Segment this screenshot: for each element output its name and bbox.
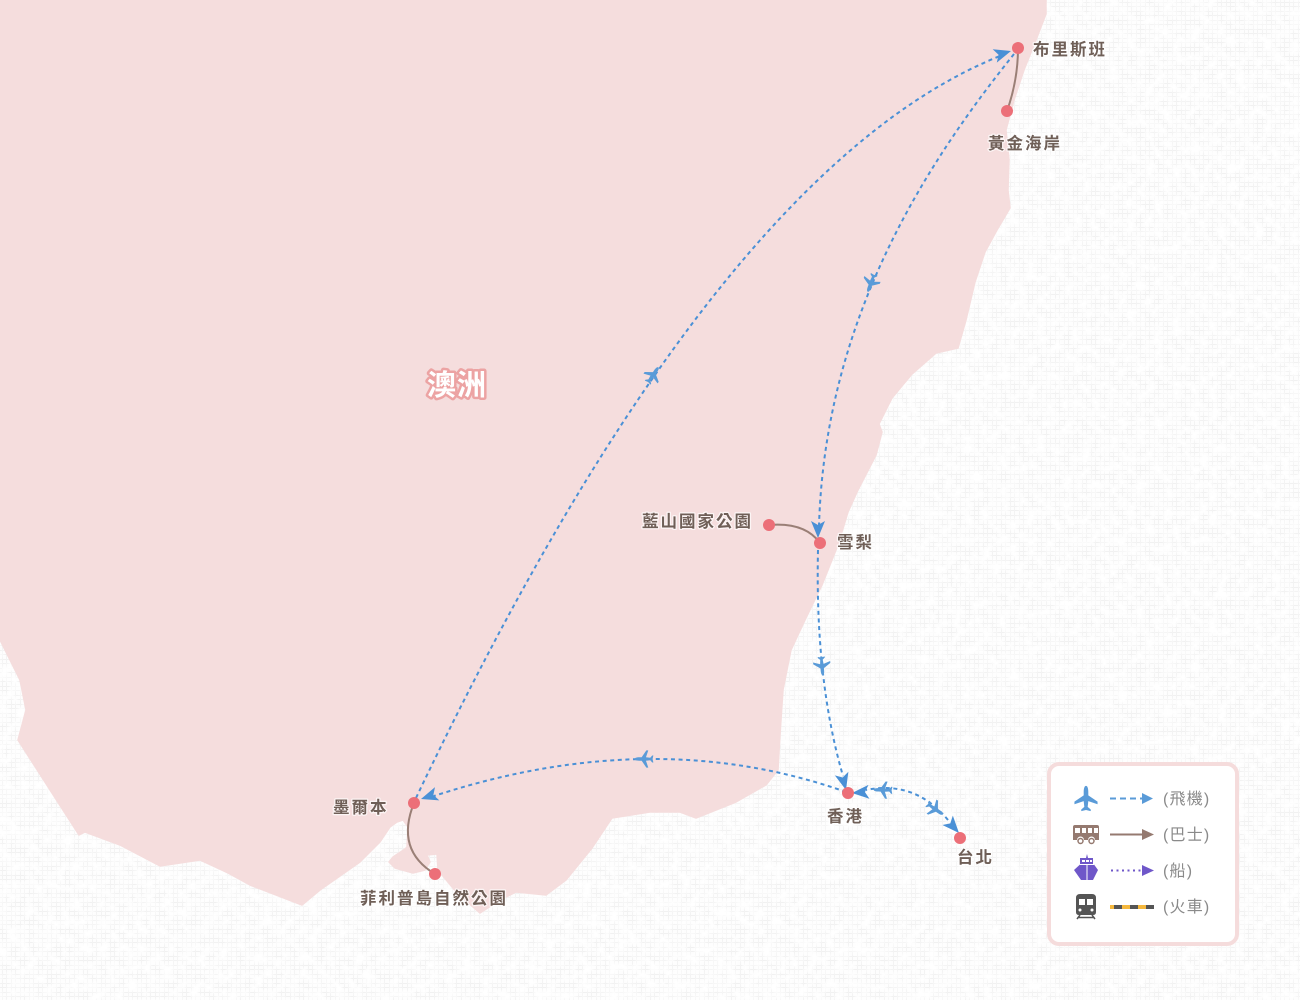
legend [1049, 764, 1237, 944]
route: Taipei to Hong Kong by plane [852, 781, 964, 838]
city: Melbourne: 墨爾本 [333, 798, 388, 817]
route: Sydney to Hong Kong by plane [813, 550, 853, 792]
city: Hong Kong [827, 787, 864, 826]
legend row: plane: (飛機) [1163, 790, 1210, 808]
city: Taipei: 台北 [957, 847, 994, 867]
city: Taipei [954, 832, 994, 867]
city: Blue Mountains National Park: 藍山國家公園 [642, 511, 753, 531]
city: Phillip Island Nature Park: 菲利普島自然公園 [360, 888, 508, 908]
legend row: bus: (巴士) [1163, 826, 1210, 844]
city: Hong Kong: 香港 [827, 807, 864, 826]
legend row: train [1076, 894, 1210, 919]
route: Brisbane to Gold Coast by bus [1007, 48, 1018, 111]
legend row: train: (火車) [1163, 898, 1210, 916]
route: Melbourne to Phillip Island by bus [408, 803, 435, 874]
city: Sydney [814, 533, 874, 552]
route: Hong Kong to Melbourne by plane [419, 750, 846, 806]
legend row: ship: (船) [1163, 862, 1193, 880]
city: Sydney: 雪梨 [837, 533, 874, 552]
city: Phillip Island Nature Park [360, 868, 508, 908]
legend panel [1049, 764, 1237, 944]
route: Brisbane to Sydney by plane [811, 54, 1014, 538]
route: Melbourne to Brisbane by plane [416, 44, 1013, 798]
city: Gold Coast: 黃金海岸 [988, 133, 1062, 153]
city: Melbourne [333, 797, 420, 817]
route: Sydney to Blue Mountains by bus [769, 525, 820, 543]
legend row: bus [1073, 825, 1210, 844]
legend row: ship [1074, 854, 1193, 880]
legend row: plane [1074, 786, 1210, 811]
map: Australia landmass [0, 0, 1046, 913]
city: Brisbane: 布里斯班 [1033, 39, 1107, 59]
city: Gold Coast [988, 105, 1062, 153]
map label: Australia: 澳洲 [427, 369, 487, 402]
